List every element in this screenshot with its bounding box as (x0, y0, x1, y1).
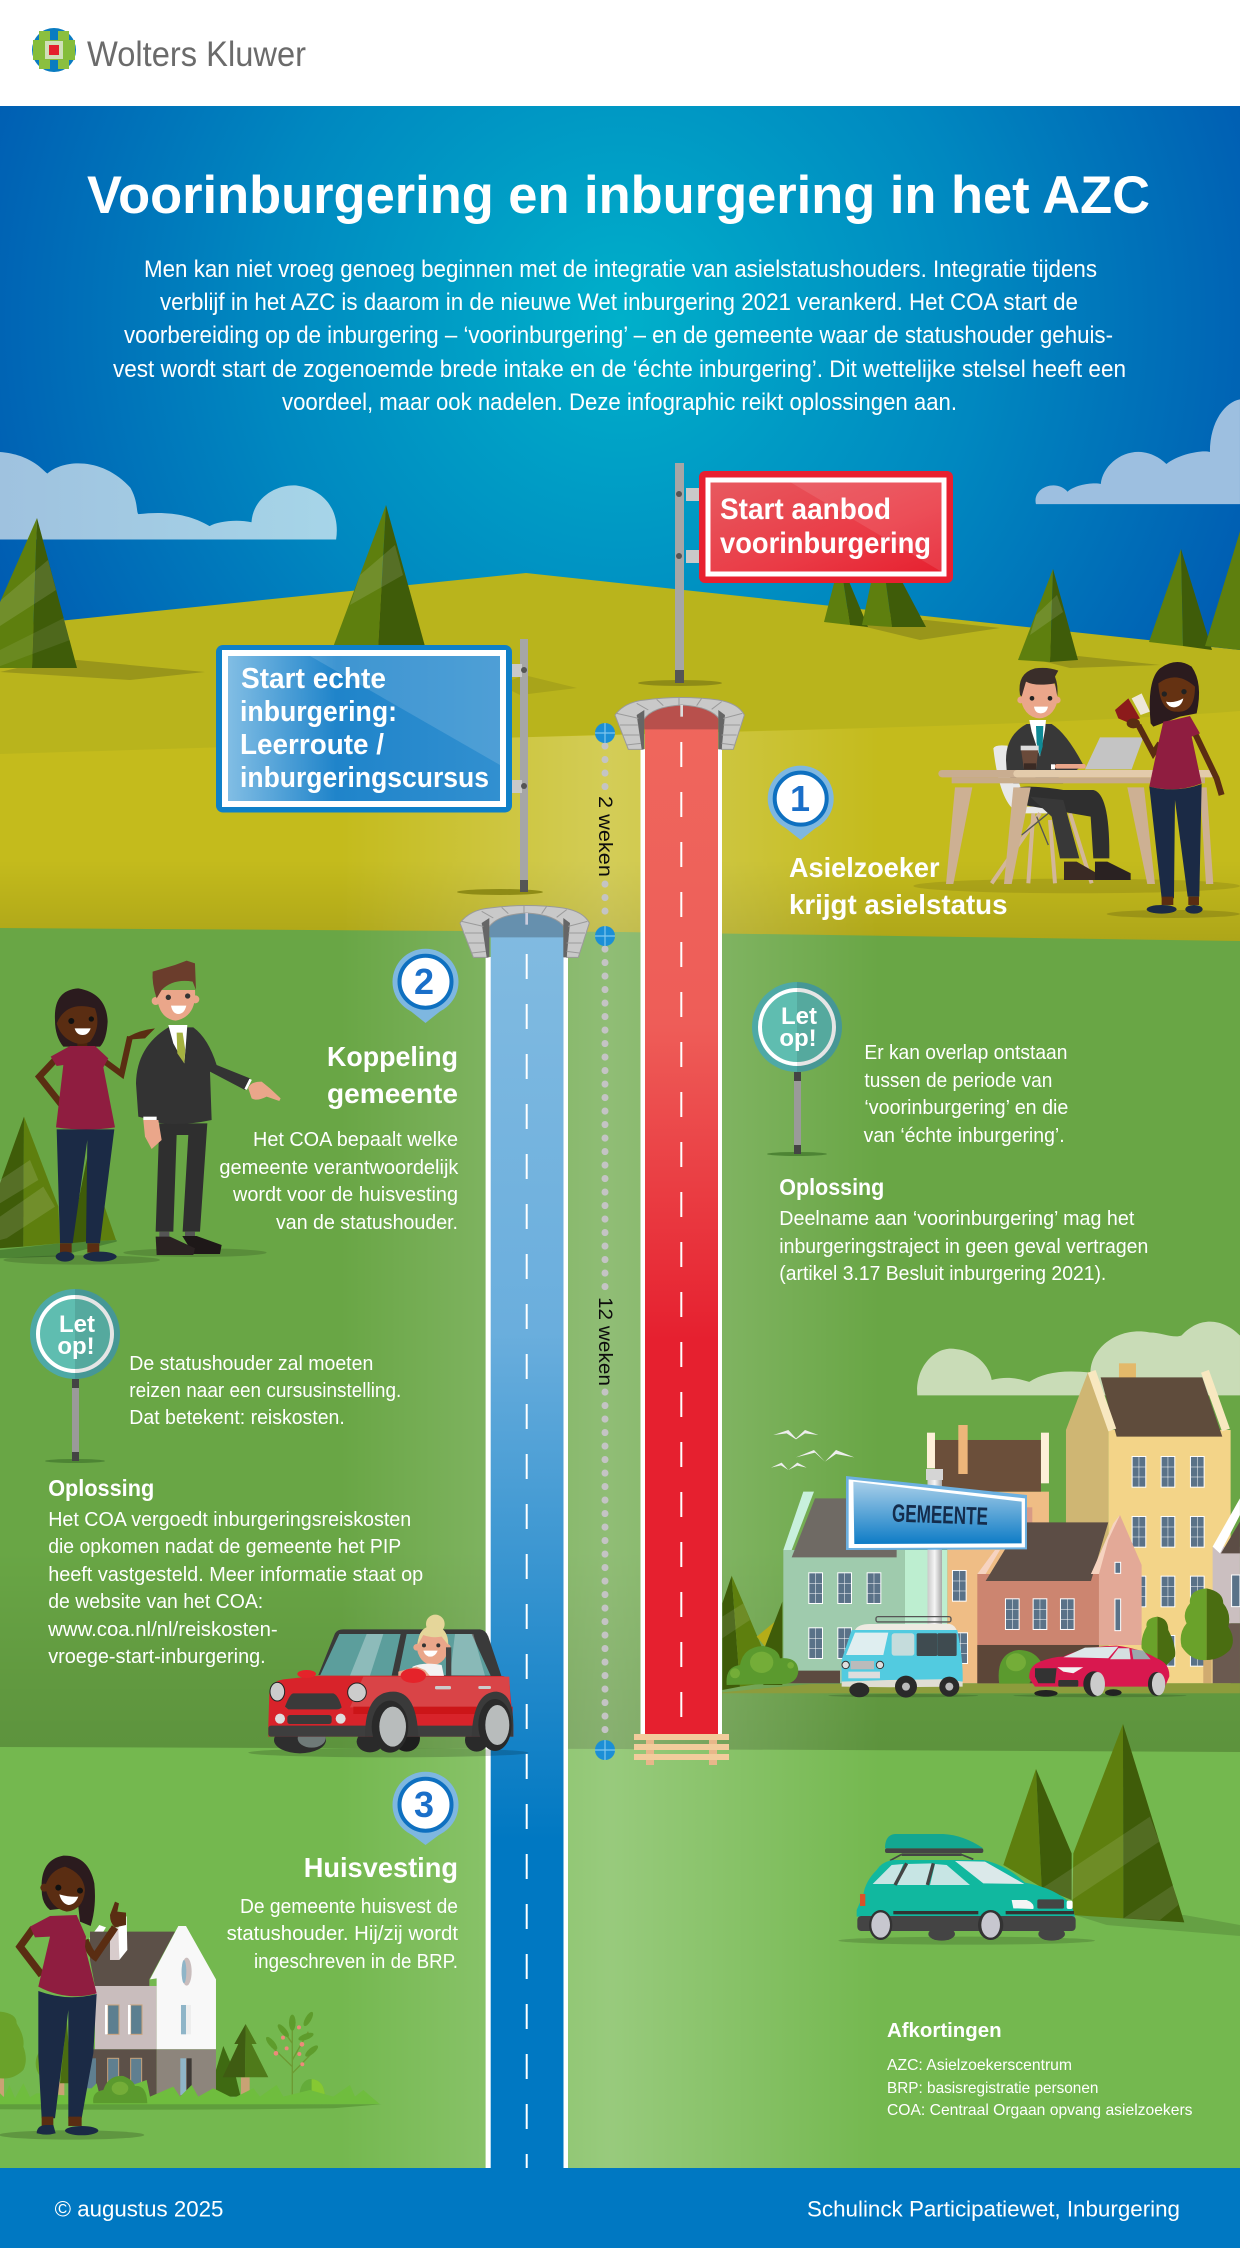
mid green field (0, 928, 1240, 1760)
abbreviations: COA: Centraal Orgaan opvang asielzoekers (887, 2102, 1192, 2119)
sign: start aanbod voorinburgering: voorinburgering (720, 527, 931, 560)
oplossing right: Oplossing (779, 1174, 884, 1200)
lower green field (0, 1747, 1240, 2168)
sign: start aanbod voorinburgering: Start aanbod (720, 493, 891, 526)
oplossing left: www.coa.nl/nl/reiskosten- (47, 1619, 278, 1641)
let op text left: De statushouder zal moeten (129, 1353, 373, 1375)
step 3 text: ingeschreven in de BRP. (254, 1951, 458, 1973)
pin 1: 1 (790, 778, 810, 819)
hill trees (0, 505, 1240, 695)
oplossing left: die opkomen nadat de gemeente het PIP (48, 1536, 401, 1558)
let op text right: van ‘échte inburgering’. (864, 1125, 1065, 1147)
van and red sedan (842, 1617, 1169, 1698)
footer source: Schulinck Participatiewet, Inburgering (807, 2196, 1180, 2222)
timeline dotted line (595, 723, 615, 1760)
pin 1 (768, 766, 834, 840)
let op text right: ‘voorinburgering’ en die (864, 1097, 1068, 1119)
cloud right (1036, 399, 1240, 504)
pin 2: 2 (414, 961, 434, 1002)
logo: Wolters Kluwer: Wolters Kluwer (87, 35, 306, 74)
step 1 heading: krijgt asielstatus (789, 889, 1008, 920)
lower right trees (1003, 1724, 1240, 1936)
sign: start echte inburgering (216, 639, 543, 895)
let op text right: Er kan overlap ontstaan (864, 1042, 1067, 1064)
label: 2 weken: 2 weken (594, 796, 615, 877)
light band behind roads (340, 728, 880, 2168)
step 1 heading (789, 852, 1008, 920)
step 3 heading: Huisvesting (304, 1852, 458, 1883)
let op text right (864, 1042, 1068, 1147)
intro text: voorbereiding op de inburgering – ‘voorinburgering’ – en de gemeente waar de statushouder gehuis- (124, 322, 1113, 349)
oplossing left: Oplossing (48, 1475, 154, 1501)
header bar (0, 0, 1240, 106)
step 2 heading: Koppeling (327, 1041, 458, 1072)
intro text: Men kan niet vroeg genoeg beginnen met de integratie van asielstatushouders. Integratie tijdens (144, 256, 1097, 283)
step 2 text: wordt voor de huisvesting (232, 1184, 458, 1206)
tunnel arch red road (615, 697, 744, 749)
logo: Wolters Kluwer (32, 28, 306, 74)
step 3 text (227, 1896, 458, 1973)
step 2 illustration: woman and man with tree (0, 961, 281, 1265)
road end barrier (634, 1734, 729, 1765)
cloud left (0, 452, 337, 540)
label: 12 weken: 12 weken (594, 1297, 615, 1386)
intro text: voordeel, maar ook nadelen. Deze infographic reikt oplossingen aan. (282, 389, 957, 416)
step 2 text: gemeente verantwoordelijk (219, 1157, 459, 1179)
step 2 text: Het COA bepaalt welke (253, 1129, 458, 1151)
let op text left: reizen naar een cursusinstelling. (129, 1380, 401, 1402)
town houses (722, 1363, 1240, 1697)
oplossing right: (artikel 3.17 Besluit inburgering 2021). (779, 1263, 1106, 1285)
town clouds (917, 1322, 1240, 1395)
field shading (0, 1550, 1240, 1755)
pin 2 (392, 949, 458, 1023)
abbreviations: BRP: basisregistratie personen (887, 2080, 1098, 2097)
let op sign left (30, 1289, 120, 1463)
oplossing left: heeft vastgesteld. Meer informatie staat op (48, 1564, 423, 1586)
let op sign right: Let (781, 1003, 817, 1030)
sign: start echte inburgering: Start echte (241, 663, 386, 695)
blue road (486, 937, 568, 2168)
yellow hill (0, 573, 1240, 950)
abbreviations: AZC: Asielzoekerscentrum (887, 2057, 1072, 2074)
let op sign left: Let (59, 1311, 95, 1338)
oplossing right: inburgeringstraject in geen geval vertragen (779, 1236, 1148, 1258)
step 3 illustration: house, woman and garden (0, 1856, 382, 2140)
intro text (113, 256, 1126, 416)
abbreviations: Afkortingen (887, 2020, 1002, 2042)
sign: start echte inburgering: inburgeringscursus (240, 762, 489, 794)
step 2 text (219, 1129, 459, 1234)
green car with roof box (838, 1834, 1095, 1945)
step 3 text: statushouder. Hij/zij wordt (227, 1923, 458, 1945)
gemeente signpost (846, 1469, 1027, 1630)
tunnel arch blue road (460, 905, 589, 957)
intro text: vest wordt start de zogenoemde brede intake en de ‘échte inburgering’. Dit wettelijke stelsel heeft een (113, 356, 1126, 383)
step 2 text: van de statushouder. (276, 1212, 458, 1234)
sign: start aanbod voorinburgering (638, 463, 953, 686)
intro text: verblijf in het AZC is daarom in de nieuwe Wet inburgering 2021 verankerd. Het COA start de (160, 289, 1078, 316)
oplossing left: Het COA vergoedt inburgeringsreiskosten (48, 1509, 411, 1531)
oplossing right: Deelname aan ‘voorinburgering’ mag het (779, 1208, 1135, 1230)
gemeente signpost: GEMEENTE (891, 1500, 988, 1531)
footer copyright: © augustus 2025 (55, 2196, 223, 2222)
let op text right: tussen de periode van (864, 1070, 1052, 1092)
oplossing left: de website van het COA: (48, 1591, 263, 1613)
oplossing right (779, 1174, 1148, 1285)
red car with driver (248, 1615, 528, 1757)
step 1 illustration: desk, man and woman (913, 662, 1240, 918)
sign: start echte inburgering: inburgering: (240, 696, 397, 728)
sky background (0, 106, 1240, 956)
step 2 heading: gemeente (327, 1078, 458, 1109)
step 3 text: De gemeente huisvest de (240, 1896, 458, 1918)
sign: start echte inburgering: Leerroute / (240, 729, 384, 761)
pin 3 (392, 1772, 458, 1845)
pin 3: 3 (414, 1784, 434, 1825)
let op text left: Dat betekent: reiskosten. (129, 1407, 345, 1429)
step 2 heading (327, 1041, 458, 1109)
footer bar (0, 2168, 1240, 2248)
oplossing left (47, 1475, 423, 1668)
title: Voorinburgering en inburgering in het AZC (87, 166, 1150, 225)
oplossing left: vroege-start-inburgering. (48, 1646, 266, 1668)
red road (640, 729, 722, 1734)
step 1 heading: Asielzoeker (789, 852, 940, 883)
abbreviations (887, 2020, 1192, 2119)
let op sign left: op! (57, 1333, 95, 1360)
let op sign right (752, 982, 842, 1156)
let op text left (129, 1353, 401, 1429)
let op sign right: op! (779, 1025, 817, 1052)
